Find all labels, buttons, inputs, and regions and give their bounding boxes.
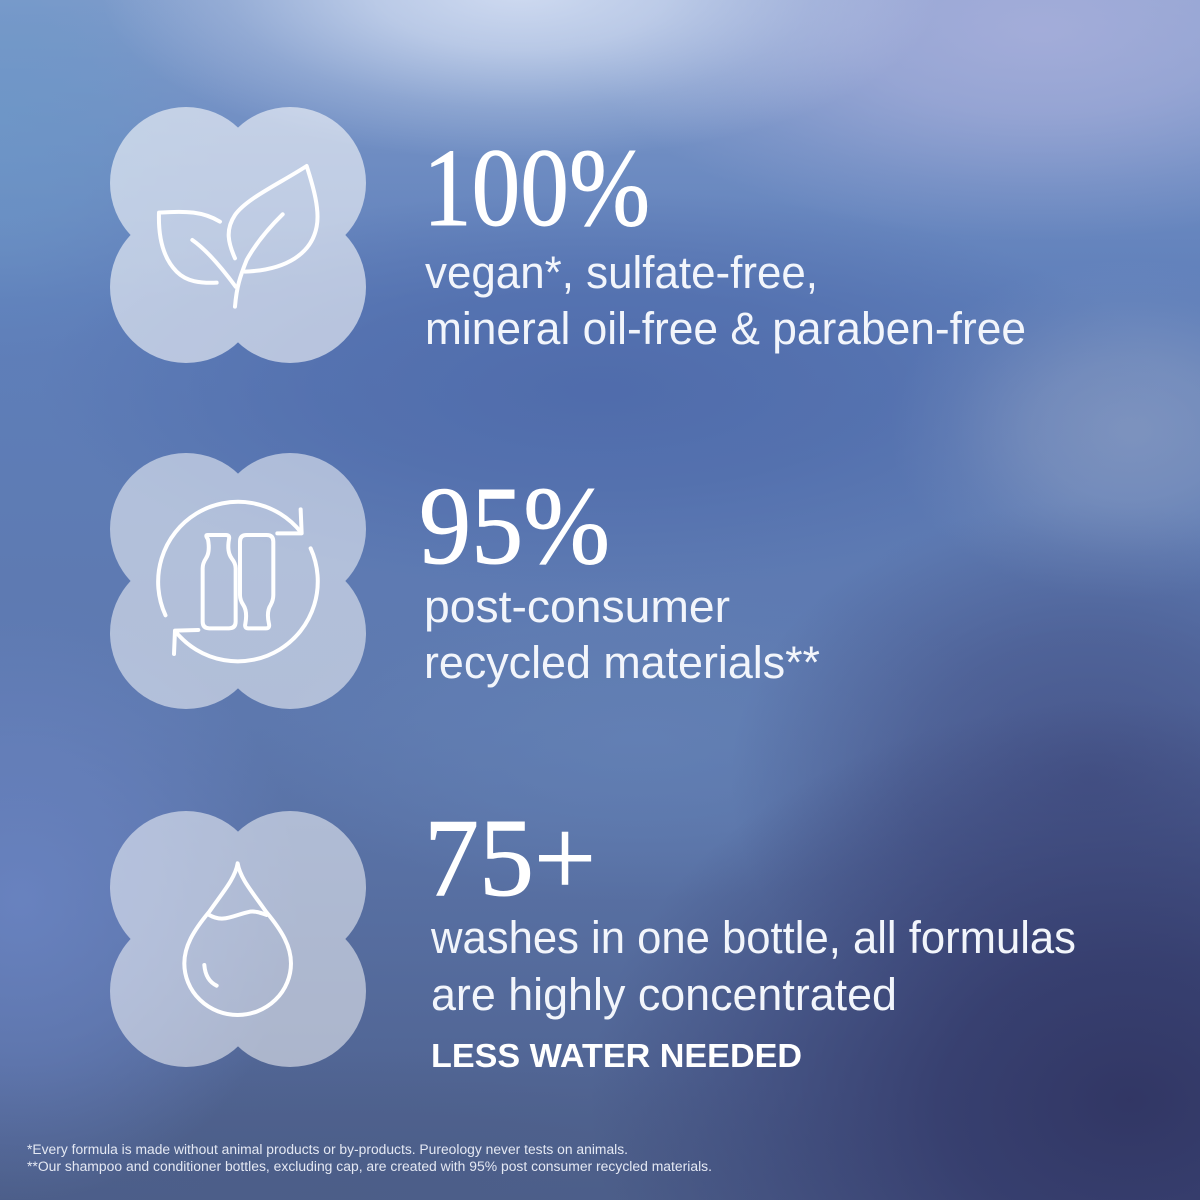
icon: recycling bottles: [158, 502, 318, 661]
panel: 100% vegan: [110, 107, 1026, 363]
description: vegan: [425, 247, 1026, 354]
description: washes: [430, 912, 1076, 1020]
description: washes: washes in one bottle, all formulas: [430, 912, 1076, 963]
icon: clover badge with leaves: [110, 107, 366, 363]
description: recycled: recycled materials**: [424, 637, 820, 688]
footnotes: *Every formula is made without animal products or by-products. Pureology never tests on animals.: [27, 1142, 628, 1157]
panel: 95% recycled: [110, 453, 820, 709]
icon: leaves: [159, 166, 318, 307]
description: vegan: vegan*, sulfate-free,: [425, 247, 818, 298]
footnotes: **Our shampoo and conditioner bottles, excluding cap, are created with 95% post consumer recycled materials.: [27, 1159, 712, 1174]
description: washes: are highly concentrated: [431, 969, 897, 1020]
icon: clover badge with water drop: [110, 811, 366, 1067]
panel: 75+ washes: [110, 797, 1076, 1074]
icon: clover badge with recycling bottles: [110, 453, 366, 709]
description: recycled: post-consumer: [424, 581, 730, 632]
stat: 75+: 75+: [424, 797, 596, 920]
icon: water drop: [184, 863, 291, 1015]
stat: 95%: 95%: [419, 465, 610, 588]
description: vegan: mineral oil-free & paraben-free: [425, 303, 1026, 354]
description: recycled: [424, 581, 820, 688]
callout: less water needed: LESS WATER NEEDED: [431, 1037, 802, 1074]
footnotes: [27, 1142, 712, 1174]
stat: 100%: 100%: [423, 127, 650, 250]
